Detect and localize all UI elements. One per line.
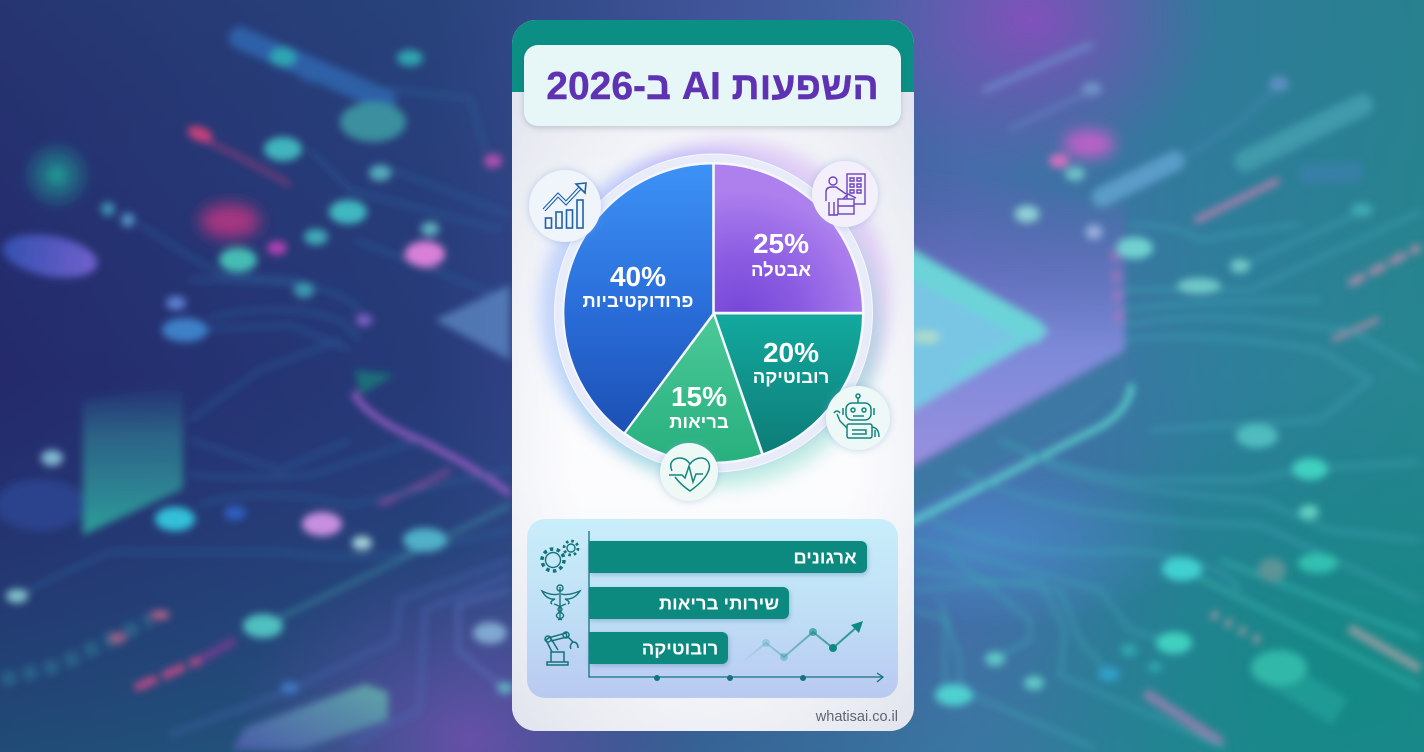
icon: worker and office building <box>812 161 878 227</box>
trend line with arrow <box>745 621 863 661</box>
label: 15%: 15% <box>671 381 727 412</box>
icon: heart with pulse <box>660 443 718 501</box>
label: 20%: 20% <box>763 337 819 368</box>
bar: organizations: ארגונים <box>793 546 857 568</box>
label: 15%: בריאות <box>669 411 729 432</box>
label: 20%: רובוטיקה <box>753 366 829 387</box>
slice: robotics 20% <box>716 314 862 453</box>
icon: rising chart <box>529 170 601 242</box>
chart axes <box>589 531 883 682</box>
icon: gears <box>542 541 578 571</box>
label: 15% <box>669 381 729 432</box>
bar: robotics <box>589 632 728 664</box>
label: 25% <box>751 228 811 280</box>
label: 40% <box>583 261 693 311</box>
right side shapes <box>905 170 1125 470</box>
slice: unemployment 25% <box>715 164 862 312</box>
panel: main card <box>512 20 914 731</box>
icon: robot <box>826 386 890 450</box>
pie chart <box>540 140 890 488</box>
panel: adoption bar chart <box>527 519 898 698</box>
icon: robot arm <box>545 632 578 665</box>
title <box>524 45 901 126</box>
icon: caduceus <box>542 585 580 620</box>
label: 40%: 40% <box>610 261 666 292</box>
slice: health 15% <box>626 316 761 462</box>
bar: health services <box>589 587 789 619</box>
label: 25%: 25% <box>753 228 809 259</box>
bar: robotics: רובוטיקה <box>642 638 718 658</box>
bar: organizations <box>589 541 867 573</box>
left side shapes <box>240 38 385 100</box>
slice: productivity 40% <box>564 164 712 432</box>
title: השפעות AI ב-2026 <box>546 65 879 108</box>
bar: health services: שירותי בריאות <box>659 592 779 614</box>
website credit: whatisai.co.il <box>815 709 898 725</box>
label: 40%: פרודוקטיביות <box>583 290 693 311</box>
label: 25%: אבטלה <box>751 259 811 280</box>
label: 20% <box>753 337 829 387</box>
